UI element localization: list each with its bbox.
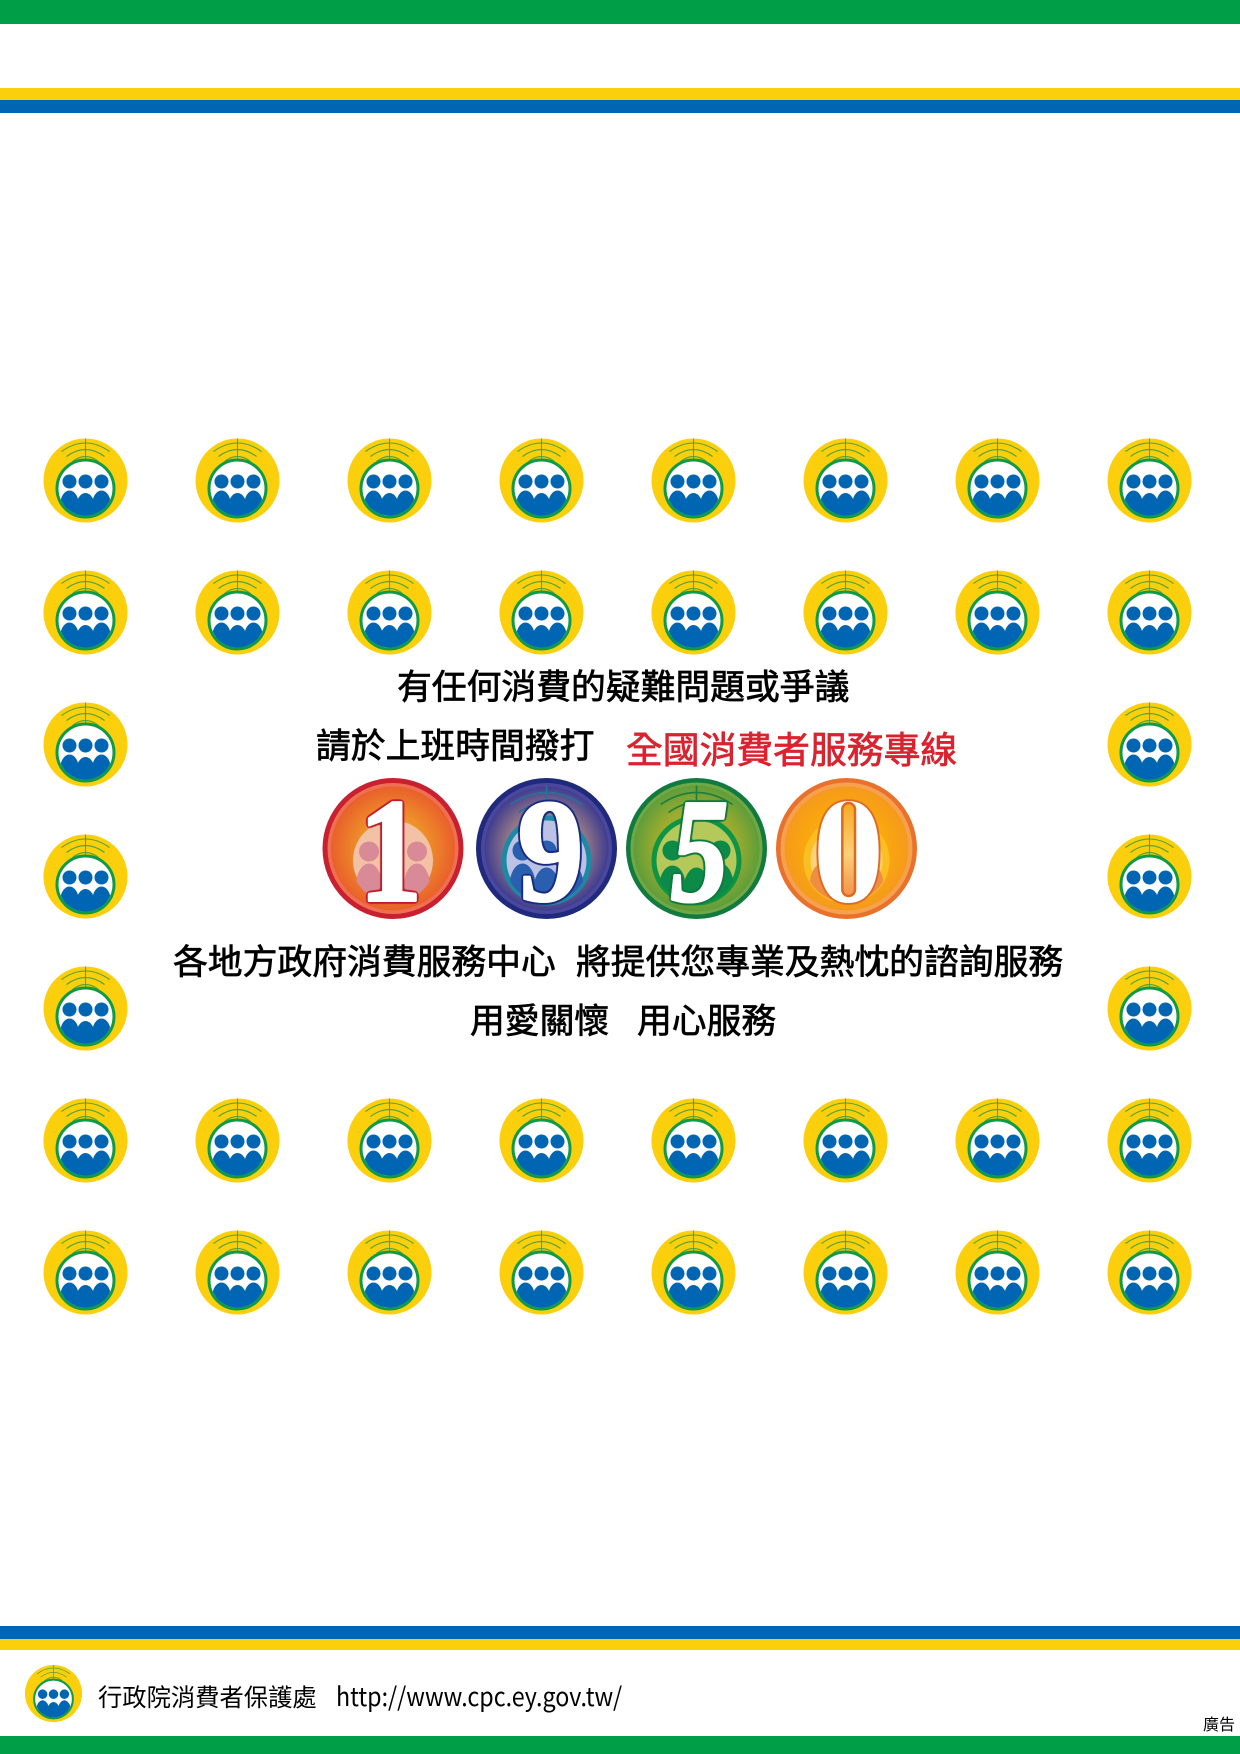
icon: logo r2c3 bbox=[348, 570, 432, 655]
icon: logo r2c5 bbox=[652, 570, 736, 655]
icon: logo r1c8 bbox=[1108, 438, 1192, 523]
icon: logo r5 right bbox=[1108, 966, 1192, 1051]
icon: logo r3 right bbox=[1108, 702, 1192, 787]
icon: logo r6c4 bbox=[500, 1098, 584, 1183]
text: hotline name in red: 全國消費者服務專線 bbox=[626, 720, 957, 774]
coin: digit 0 bbox=[776, 778, 917, 919]
text: slogan part one: 用愛關懷 bbox=[470, 994, 609, 1044]
text: local government service center: 各地方政府消費服務中心 bbox=[173, 935, 556, 985]
coin: digit 1 bbox=[322, 778, 464, 919]
coin: digit 0: 0 bbox=[814, 769, 883, 933]
icon: logo r2c6 bbox=[804, 570, 888, 655]
icon: logo r7c1 bbox=[44, 1230, 128, 1315]
footer organisation name: 行政院消費者保護處 bbox=[98, 1678, 317, 1713]
icon: logo r1c7 bbox=[956, 438, 1040, 523]
icon: logo r6c7 bbox=[956, 1098, 1040, 1183]
icon: logo r2c2 bbox=[196, 570, 280, 655]
icon: logo r1c4 bbox=[500, 438, 584, 523]
bottom green band bbox=[0, 1736, 1240, 1754]
icon grid: consumer protection logos bbox=[44, 438, 1192, 1315]
icon: logo r2c1 bbox=[44, 570, 128, 655]
coin: digit 5: 5 bbox=[671, 769, 728, 933]
graphics layer: logo border and 1950 coins bbox=[24, 438, 1192, 1722]
icon: logo r7c2 bbox=[196, 1230, 280, 1315]
coin: digit 5 bbox=[626, 778, 767, 919]
icon: logo r6c1 bbox=[44, 1098, 128, 1183]
icon: logo r7c3 bbox=[348, 1230, 432, 1315]
icon: logo r3 left bbox=[44, 702, 128, 787]
icon: logo r2c8 bbox=[1108, 570, 1192, 655]
advertisement tag: 廣告 bbox=[1203, 1711, 1235, 1735]
icon: logo r6c3 bbox=[348, 1098, 432, 1183]
icon: logo r6c8 bbox=[1108, 1098, 1192, 1183]
bottom blue stripe bbox=[0, 1626, 1240, 1639]
coin: digit 9: 9 bbox=[517, 770, 584, 933]
icon: logo r1c3 bbox=[348, 438, 432, 523]
icon: logo r2c4 bbox=[500, 570, 584, 655]
top yellow stripe bbox=[0, 88, 1240, 100]
icon: logo r6c5 bbox=[652, 1098, 736, 1183]
icon: logo r7c6 bbox=[804, 1230, 888, 1315]
top green band bbox=[0, 0, 1240, 24]
text: slogan part two: 用心服務 bbox=[637, 994, 776, 1044]
text: professional consultation: 將提供您專業及熱忱的諮詢服務 bbox=[576, 935, 1063, 985]
text: call line: 請於上班時間撥打 bbox=[316, 719, 594, 769]
icon: logo r6c6 bbox=[804, 1098, 888, 1183]
icon: logo r4 left bbox=[44, 834, 128, 919]
icon: logo r1c6 bbox=[804, 438, 888, 523]
icon: logo r4 right bbox=[1108, 834, 1192, 919]
top blue stripe bbox=[0, 100, 1240, 113]
icon: logo r7c7 bbox=[956, 1230, 1040, 1315]
icon: logo r1c5 bbox=[652, 438, 736, 523]
footer URL: http://www.cpc.ey.gov.tw/ bbox=[336, 1677, 622, 1714]
icon: logo r5 left bbox=[44, 966, 128, 1051]
icon: logo r7c8 bbox=[1108, 1230, 1192, 1315]
icon: logo r2c7 bbox=[956, 570, 1040, 655]
icon: logo r6c2 bbox=[196, 1098, 280, 1183]
icon: footer logo bbox=[25, 1665, 82, 1722]
text: question line: 有任何消費的疑難問題或爭議 bbox=[397, 660, 849, 710]
coin: digit 9 bbox=[476, 778, 617, 919]
icon: logo r7c4 bbox=[500, 1230, 584, 1315]
coin: digit 1: 1 bbox=[359, 769, 422, 933]
icon: logo r7c5 bbox=[652, 1230, 736, 1315]
bottom yellow stripe bbox=[0, 1639, 1240, 1650]
icon: logo r1c1 bbox=[44, 438, 128, 523]
icon: logo r1c2 bbox=[196, 438, 280, 523]
